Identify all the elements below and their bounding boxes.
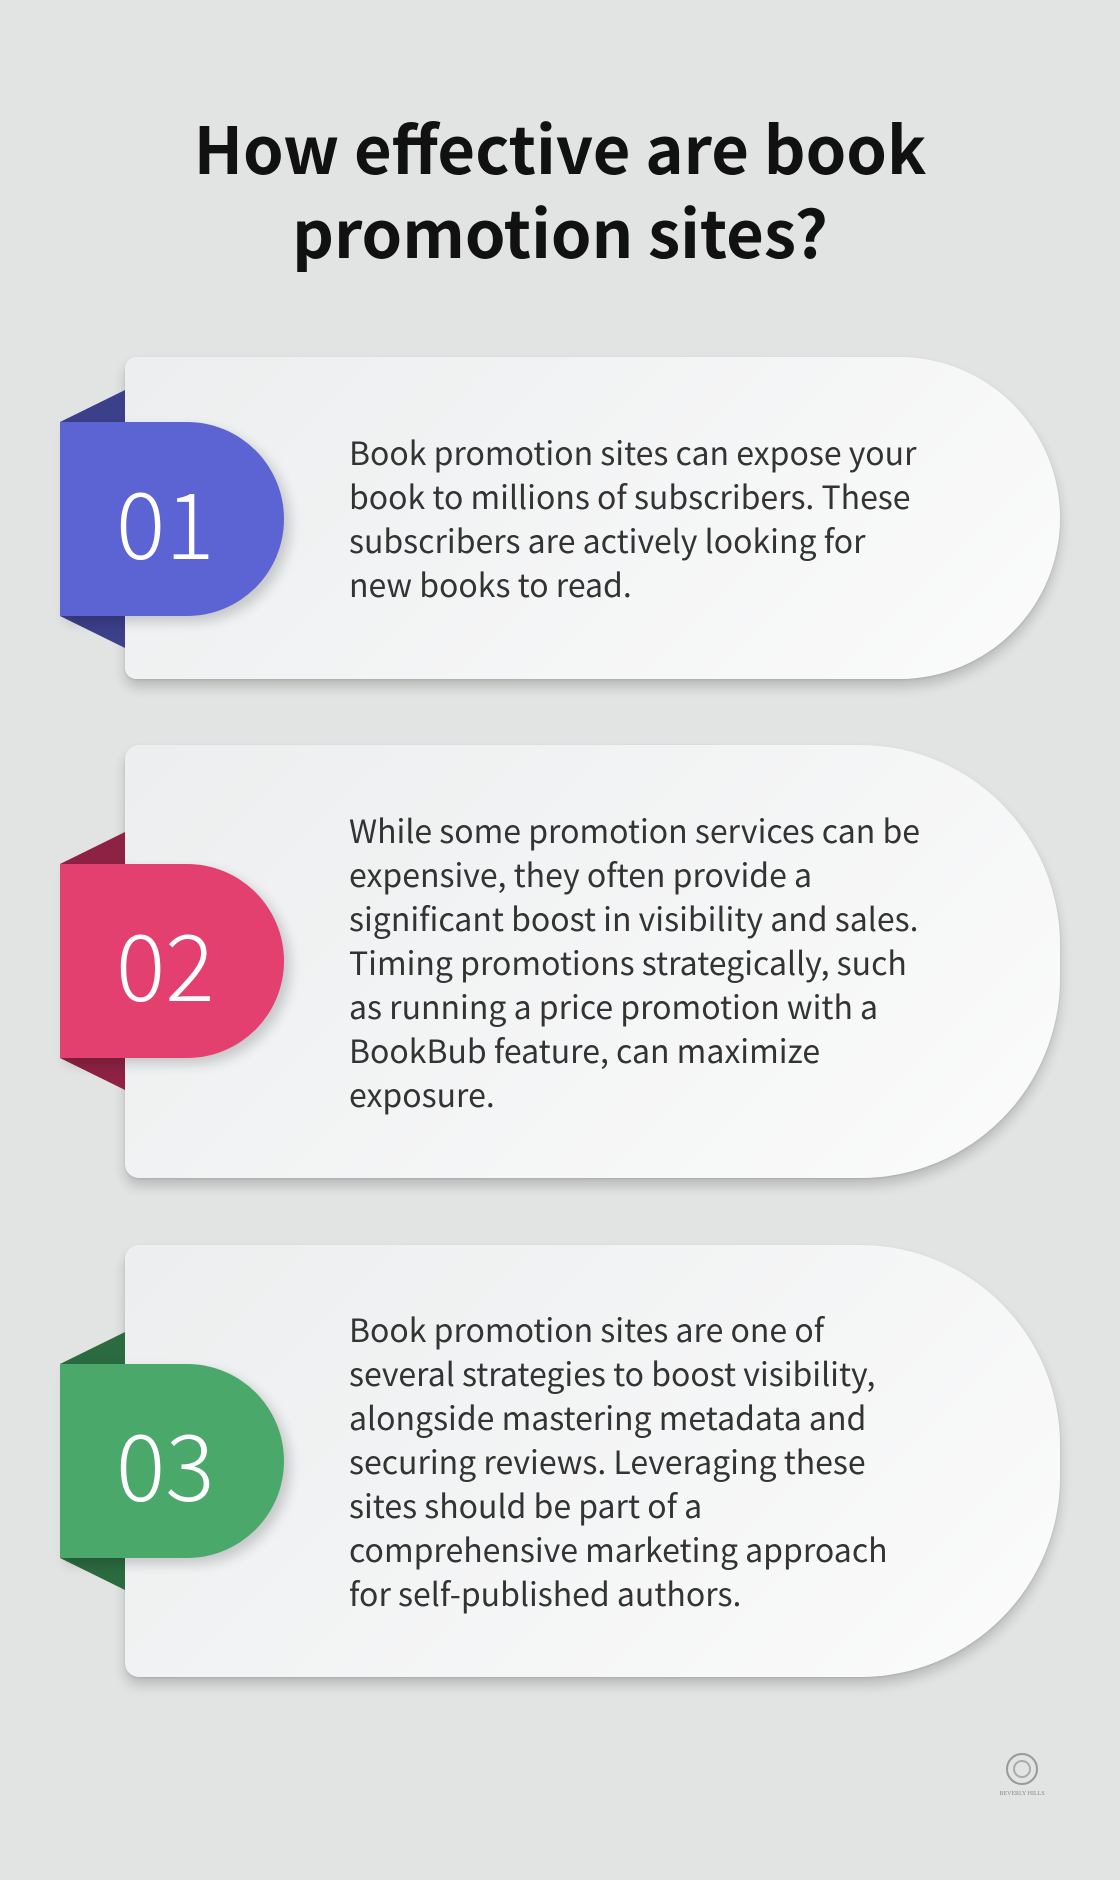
card 3: Book promotion sites are one of <box>349 1306 824 1352</box>
fold bottom 3 <box>60 1558 125 1590</box>
panel: item 3 <box>60 1245 1065 1690</box>
card 2: significant boost in visibility and sales. <box>349 894 918 940</box>
number tab 02: 02 <box>116 894 214 1028</box>
number tab 01: 01 <box>116 452 214 586</box>
card 3: comprehensive marketing approach <box>349 1526 888 1572</box>
card 2: While some promotion services can be <box>349 806 920 852</box>
fold top 1 <box>60 390 125 422</box>
card 2: expensive, they often provide a <box>349 850 812 896</box>
card 1: new books to read. <box>349 561 632 607</box>
card 1: subscribers are actively looking for <box>349 517 866 563</box>
card 3: for self-published authors. <box>349 1570 741 1616</box>
card 2: as running a price promotion with a <box>349 982 878 1028</box>
card 3: alongside mastering metadata and <box>349 1394 866 1440</box>
title: promotion sites? <box>292 183 828 277</box>
fold bottom 1 <box>60 616 125 648</box>
card 2: BookBub feature, can maximize <box>349 1026 820 1072</box>
logo <box>999 1753 1045 1797</box>
card 2 <box>125 745 1060 1178</box>
logo: BEVERLY HILLS <box>999 1791 1045 1797</box>
title <box>194 99 926 277</box>
panel: item 1 <box>60 357 1065 692</box>
card 1: book to millions of subscribers. These <box>349 473 911 519</box>
panel: item 2 <box>60 745 1065 1191</box>
card 2: Timing promotions strategically, such <box>349 938 907 984</box>
number tab 02 <box>60 864 284 1058</box>
fold bottom 2 <box>60 1058 125 1090</box>
card 3 <box>125 1245 1060 1677</box>
number tab 03 <box>60 1364 284 1558</box>
fold top 2 <box>60 832 125 864</box>
number tab 03: 03 <box>116 1394 214 1528</box>
title: How effective are book <box>194 99 926 193</box>
card 2: exposure. <box>349 1070 495 1116</box>
card 3: securing reviews. Leveraging these <box>349 1438 866 1484</box>
card 3: sites should be part of a <box>349 1482 702 1528</box>
card 3: several strategies to boost visibility, <box>349 1350 875 1396</box>
card 1: Book promotion sites can expose your <box>349 429 916 475</box>
card 1 <box>125 357 1060 679</box>
fold top 3 <box>60 1332 125 1364</box>
number tab 01 <box>60 422 284 616</box>
